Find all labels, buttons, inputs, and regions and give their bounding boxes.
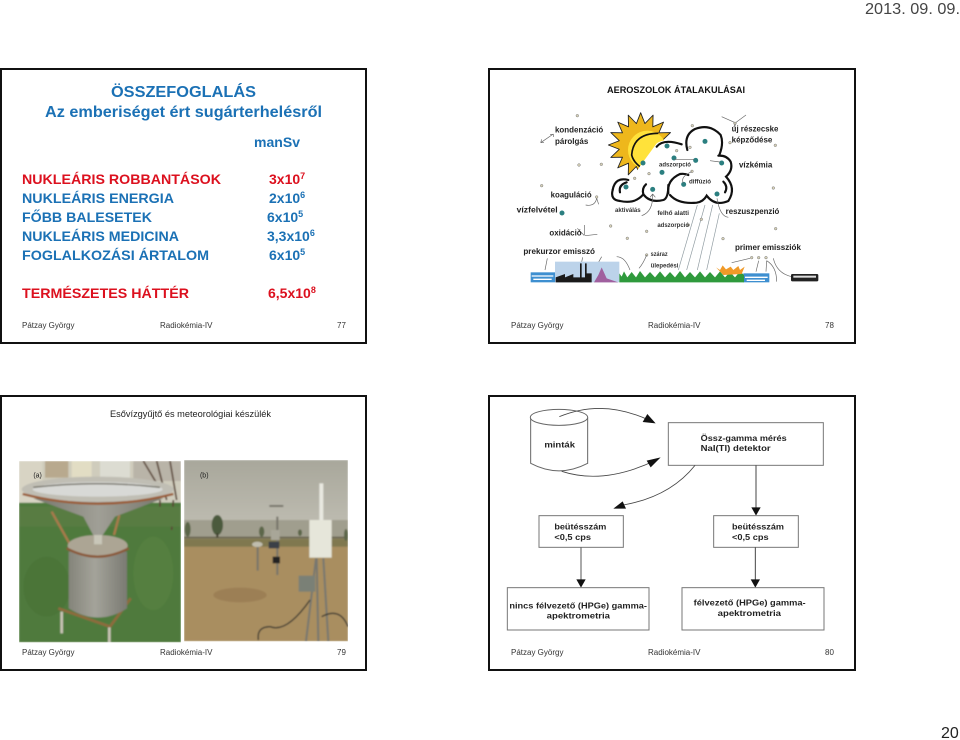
process labels: adszorpció [657, 223, 689, 229]
table: radiation exposure sources: 2x10 [269, 190, 300, 206]
curved arrow: sample to detector [559, 408, 656, 423]
process labels: képződése [732, 135, 773, 145]
table: radiation exposure sources: FOGLALKOZÁSI ÁRTALOM [22, 247, 209, 263]
footer [511, 321, 834, 330]
process labels: vízkémia [739, 159, 773, 169]
icon: cloud [612, 127, 733, 204]
diagram heading: AEROSZOLOK ÁTALAKULÁSAI [607, 85, 745, 95]
process labels: reszuszpenzió [726, 206, 779, 216]
footer: Radiokémia-IV [648, 648, 701, 657]
photo labels: (b) [200, 472, 209, 479]
curved arrow: detector to sample [562, 457, 661, 476]
table: radiation exposure sources: 5 [298, 209, 303, 219]
curved arrow: detector to left count box [613, 465, 695, 509]
table: radiation exposure sources: 3,3x10 [267, 228, 310, 244]
box: count rate right: <0,5 cps [732, 532, 769, 542]
box: total gamma measurement [668, 423, 823, 465]
process labels: prekurzor emisszó [523, 246, 595, 256]
process labels: diffúzió [689, 179, 711, 185]
footer: Pátzay György [22, 648, 74, 657]
footer [22, 648, 346, 657]
table: radiation exposure sources: 7 [300, 171, 305, 181]
footer: Radiokémia-IV [648, 321, 701, 330]
table: radiation exposure sources: 8 [311, 285, 316, 295]
footer: 80 [825, 648, 834, 657]
footer: Pátzay György [511, 648, 563, 657]
box: count rate left: beütésszám [554, 521, 606, 531]
title: ÖSSZEFOGLALÁS [111, 82, 256, 101]
process labels: száraz [651, 252, 668, 258]
box: count rate left: <0,5 cps [554, 532, 591, 542]
diagram: aerosol processes [517, 113, 818, 282]
process labels: aktiválás [615, 208, 641, 214]
arrow: right count to HPGe [751, 547, 760, 588]
slide heading: Esővízgyűjtő és meteorológiai készülék [110, 409, 271, 420]
teal aerosol particles [559, 139, 724, 215]
icon: sun [608, 113, 673, 177]
box: no HPGe spectrometry: apektrometria [547, 610, 610, 620]
footer: Pátzay György [22, 321, 74, 330]
footer: Radiokémia-IV [160, 648, 213, 657]
arrow: left count to no HPGe [576, 547, 586, 588]
process arrows [541, 115, 792, 282]
box: total gamma measurement: Össz-gamma mérés [701, 433, 787, 443]
cylinder: minták [530, 409, 588, 471]
table: radiation exposure sources: FŐBB BALESETEK [22, 208, 152, 225]
footer: 78 [825, 321, 834, 330]
panel: slide 78 aerosol transformations [489, 69, 855, 343]
footer: Radiokémia-IV [160, 321, 213, 330]
box: count rate left [539, 516, 623, 547]
footer: Pátzay György [511, 321, 563, 330]
process labels: új részecske [732, 124, 779, 134]
header date: 2013. 09. 09. [865, 1, 960, 18]
table: radiation exposure sources: 6x10 [267, 209, 298, 225]
table: radiation exposure sources: 6 [310, 228, 315, 238]
box: HPGe spectrometry: félvezető (HPGe) gamma- [694, 598, 806, 608]
table: radiation exposure sources: 6,5x10 [268, 285, 311, 301]
process labels: kondenzáció [555, 124, 603, 134]
table: radiation exposure sources: 5 [300, 247, 305, 257]
process labels: primer emissziók [735, 242, 801, 252]
panel: slide 77 summary [1, 69, 366, 343]
footer [511, 648, 834, 657]
box: total gamma measurement: NaI(Tl) detektor [701, 443, 772, 453]
panel: slide 79 rainwater collector [1, 396, 366, 670]
table: radiation exposure sources: TERMÉSZETES HÁTTÉR [22, 285, 189, 301]
ground: emission sources [531, 262, 818, 282]
photo (a): rainwater collector [19, 461, 181, 642]
title: Az emberiséget ért sugárterhelésről [45, 104, 322, 121]
process labels [517, 124, 801, 269]
small aerosol particles [540, 114, 777, 259]
footer: 79 [337, 648, 346, 657]
process labels: oxidáció [549, 228, 582, 238]
process labels: vízfelvétel [517, 205, 558, 215]
photo (b): meteorological station [184, 460, 348, 641]
title [45, 82, 322, 121]
panel: slide 80 measurement flowchart [489, 396, 855, 670]
table: radiation exposure sources: 3x10 [269, 171, 300, 187]
rain lines [678, 205, 719, 270]
table: radiation exposure sources [22, 171, 316, 301]
box: count rate right [714, 516, 798, 547]
table: radiation exposure sources: 6x10 [269, 247, 300, 263]
photos [19, 460, 348, 642]
column heading: manSv: manSv [254, 134, 300, 150]
table: radiation exposure sources: NUKLEÁRIS ENERGIA [22, 190, 174, 206]
box: no HPGe spectrometry [507, 588, 649, 630]
box: HPGe spectrometry [682, 588, 824, 630]
process labels: párolgás [555, 136, 589, 146]
process labels: felhő alatti [657, 211, 689, 217]
arrow: detector to right count box [751, 465, 761, 516]
process labels: ülepedési [651, 263, 679, 269]
photo labels: (a) [33, 472, 42, 479]
table: radiation exposure sources: NUKLEÁRIS ROBBANTÁSOK [22, 171, 221, 187]
table: radiation exposure sources: 6 [300, 190, 305, 200]
flowchart [507, 408, 824, 630]
box: HPGe spectrometry: apektrometria [718, 608, 781, 618]
box: count rate right: beütésszám [732, 521, 784, 531]
process labels: koaguláció [551, 190, 592, 200]
footer [22, 321, 346, 330]
box: no HPGe spectrometry: nincs félvezető (HPGe) gamma- [509, 600, 647, 610]
photo labels [33, 472, 209, 479]
cylinder: minták: minták [544, 439, 575, 449]
process labels: adszorpció [659, 163, 691, 169]
table: radiation exposure sources: NUKLEÁRIS MEDICINA [22, 228, 179, 244]
footer: 77 [337, 321, 346, 330]
